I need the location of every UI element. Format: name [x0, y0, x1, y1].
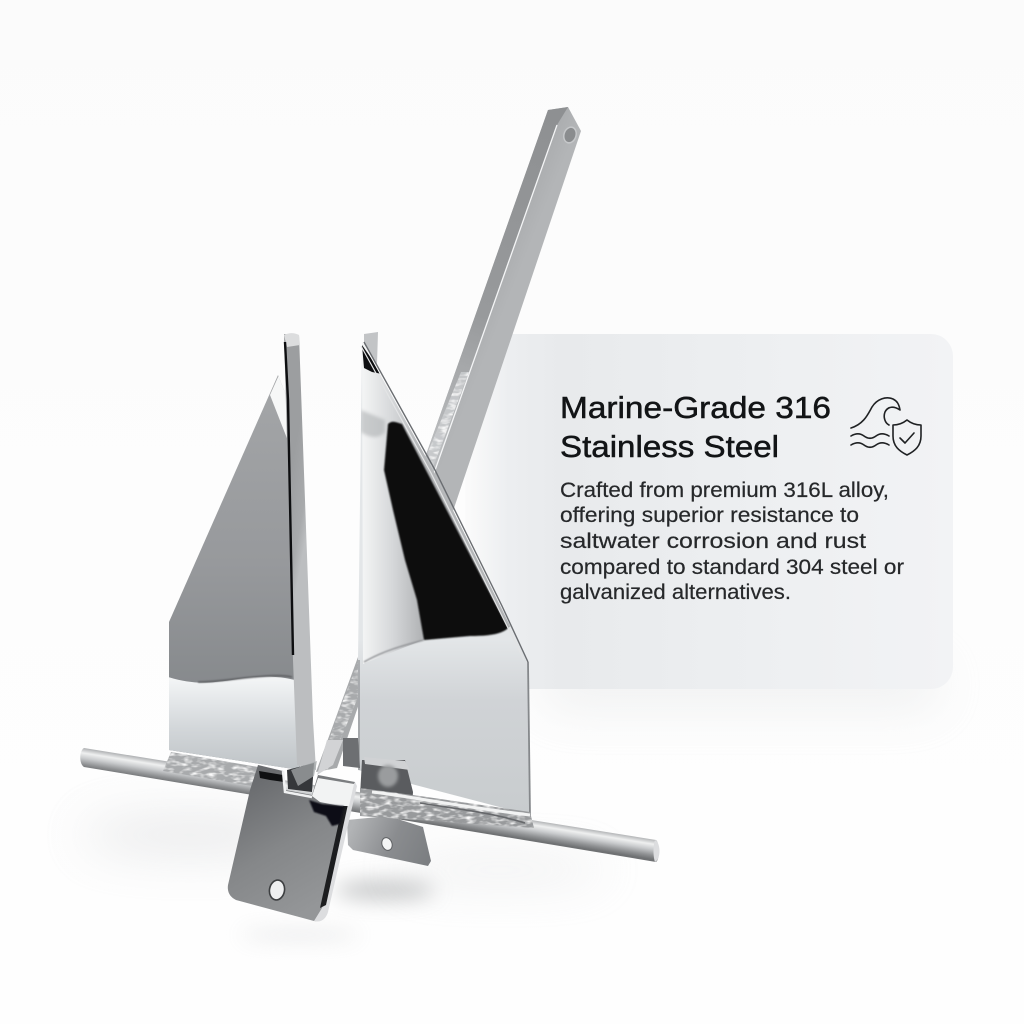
plate hole: [268, 879, 286, 901]
heading: Stainless Steel: [560, 429, 779, 464]
plate top reflection: [312, 778, 354, 806]
right fluke: [358, 332, 530, 815]
diagonal leg top: [317, 740, 343, 775]
icon: wave and shield: [851, 398, 921, 455]
anchor shank: [410, 107, 581, 520]
panel: material info card: [465, 334, 953, 689]
right fluke edges: [364, 332, 378, 364]
body text: saltwater corrosion and rust: [560, 530, 866, 553]
back plate: [347, 816, 431, 866]
body text: galvanized alternatives.: [560, 581, 791, 604]
plate notch: [287, 763, 314, 792]
body text: [560, 479, 904, 604]
diagonal leg: [316, 657, 361, 772]
left fluke: [165, 333, 316, 780]
front plate: [228, 761, 357, 922]
heading: Marine-Grade 316: [560, 390, 831, 425]
body text: compared to standard 304 steel or: [560, 556, 904, 579]
panel: card shadow: [540, 660, 940, 710]
plate edge: [314, 782, 357, 922]
center block: [343, 738, 413, 808]
heading: [560, 390, 831, 464]
body text: Crafted from premium 316L alloy,: [560, 479, 889, 502]
left fluke rib: [284, 334, 316, 770]
ground shadows: [80, 815, 610, 940]
cross rod: [80, 748, 660, 862]
rod welds: [163, 752, 534, 828]
body text: offering superior resistance to: [560, 504, 859, 527]
